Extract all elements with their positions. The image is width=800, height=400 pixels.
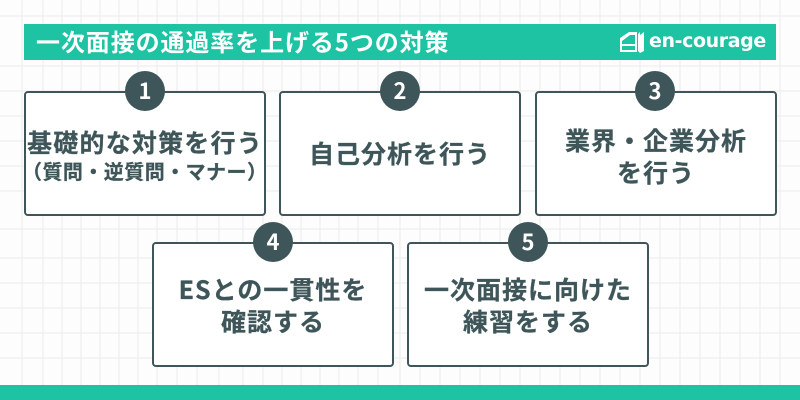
number 5: [508, 222, 548, 262]
card 3 heading: 業界・企業分析: [565, 122, 747, 158]
card 5 heading: [424, 271, 632, 339]
card 1 heading: 基礎的な対策を行う: [27, 124, 263, 160]
card 3 box: [535, 91, 777, 216]
card 1: [22, 71, 267, 216]
logo: en-courage: [620, 30, 766, 53]
footer bar: [0, 385, 800, 400]
card 1 subheading: （質問・逆質問・マナー）: [22, 156, 267, 185]
icon: logo mark: [620, 32, 644, 53]
number 2: [380, 71, 420, 111]
number 1: 1: [138, 74, 151, 106]
number 5: 5: [522, 225, 534, 257]
number 3: [635, 71, 675, 111]
number 4: [253, 222, 293, 262]
card 5 heading: 練習をする: [463, 303, 593, 339]
card 4 heading: [179, 271, 367, 339]
card 2 box: [279, 91, 521, 216]
card 5 heading: 一次面接に向けた: [424, 271, 632, 307]
card 2 heading: 自己分析を行う: [309, 135, 491, 171]
number 4: 4: [266, 225, 279, 257]
card 2: [279, 71, 521, 216]
card 5: [407, 222, 649, 367]
card 4 heading: ESとの一貫性を: [179, 271, 367, 307]
number 2: 2: [394, 74, 406, 106]
number 3: 3: [648, 74, 661, 106]
title banner: [24, 24, 776, 60]
logo wordmark: en-courage: [649, 30, 766, 52]
card 4 heading: 確認する: [221, 303, 325, 339]
number 1: [125, 71, 165, 111]
card 3 heading: [565, 122, 747, 190]
title: 一次面接の通過率を上げる5つの対策: [36, 23, 449, 58]
card 3: [535, 71, 777, 216]
card 4: [152, 222, 394, 367]
card 1 box: [24, 91, 266, 216]
card 4 box: [152, 242, 394, 367]
card 3 heading: を行う: [617, 154, 695, 190]
card 5 box: [407, 242, 649, 367]
